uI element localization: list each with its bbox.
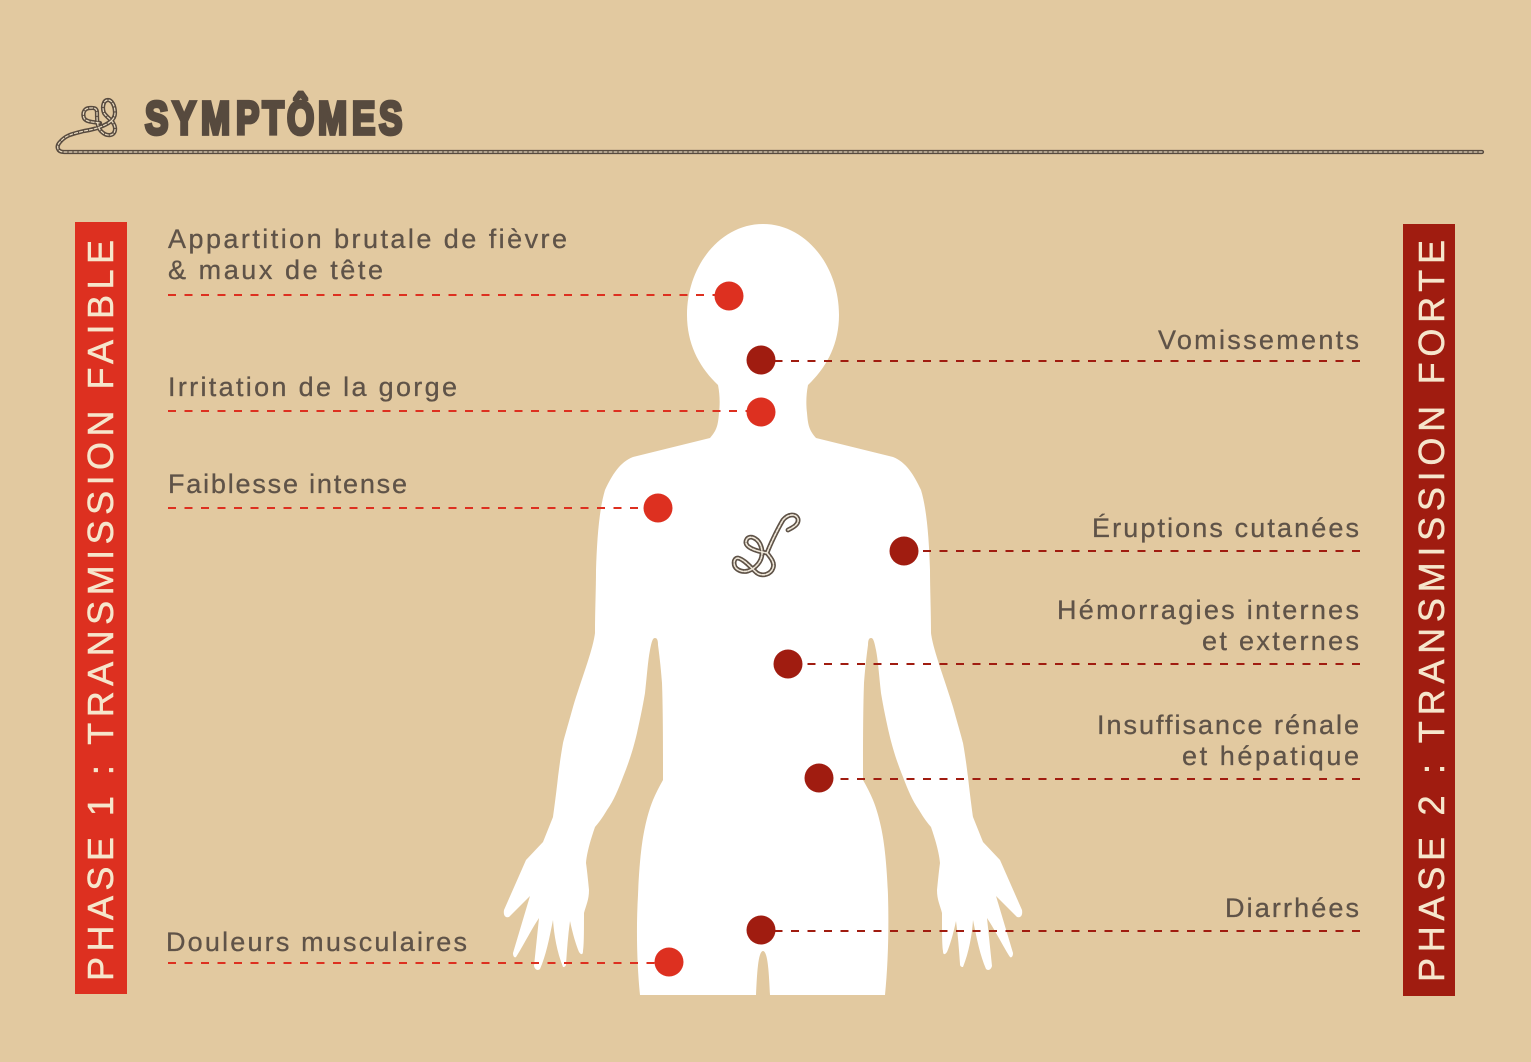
symptom: bleeding: et externes	[1202, 626, 1359, 656]
symptom: bleeding: Hémorragies internes	[1057, 595, 1359, 625]
symptom: fever and headache: & maux de tête	[168, 255, 383, 285]
symptom: sore throat: Irritation de la gorge	[168, 372, 457, 402]
icon: virus on chest	[734, 515, 798, 575]
symptom: vomiting	[746, 325, 1360, 374]
symptom: vomiting: Vomissements	[1158, 325, 1359, 355]
symptom: diarrhea: Diarrhées	[1225, 893, 1359, 923]
symptom: fever and headache: Appartition brutale de fièvre	[168, 224, 567, 254]
body silhouette	[504, 224, 1022, 995]
panel: phase 2 banner: PHASE 2 : TRANSMISSION FORTE	[1411, 240, 1452, 982]
symptom: intense weakness: Faiblesse intense	[168, 469, 407, 499]
symptom: muscle pain: Douleurs musculaires	[166, 927, 467, 957]
symptom: fever and headache	[168, 224, 744, 310]
symptom: sore throat	[168, 372, 776, 426]
symptom: intense weakness	[168, 469, 672, 522]
header rope icon and rule	[58, 100, 1482, 152]
symptom: kidney and liver failure: et hépatique	[1182, 741, 1359, 771]
symptom: kidney and liver failure: Insuffisance rénale	[1097, 710, 1359, 740]
symptom: skin rash	[890, 513, 1360, 566]
symptom: muscle pain	[166, 927, 684, 976]
symptom: bleeding	[774, 595, 1360, 678]
panel: phase 1 banner: PHASE 1 : TRANSMISSION FAIBLE	[80, 240, 121, 981]
symptom: skin rash: Éruptions cutanées	[1092, 513, 1359, 543]
title: SYMPTÔMES	[145, 92, 402, 144]
symptom: diarrhea	[746, 893, 1360, 944]
symptom: kidney and liver failure	[804, 710, 1360, 792]
